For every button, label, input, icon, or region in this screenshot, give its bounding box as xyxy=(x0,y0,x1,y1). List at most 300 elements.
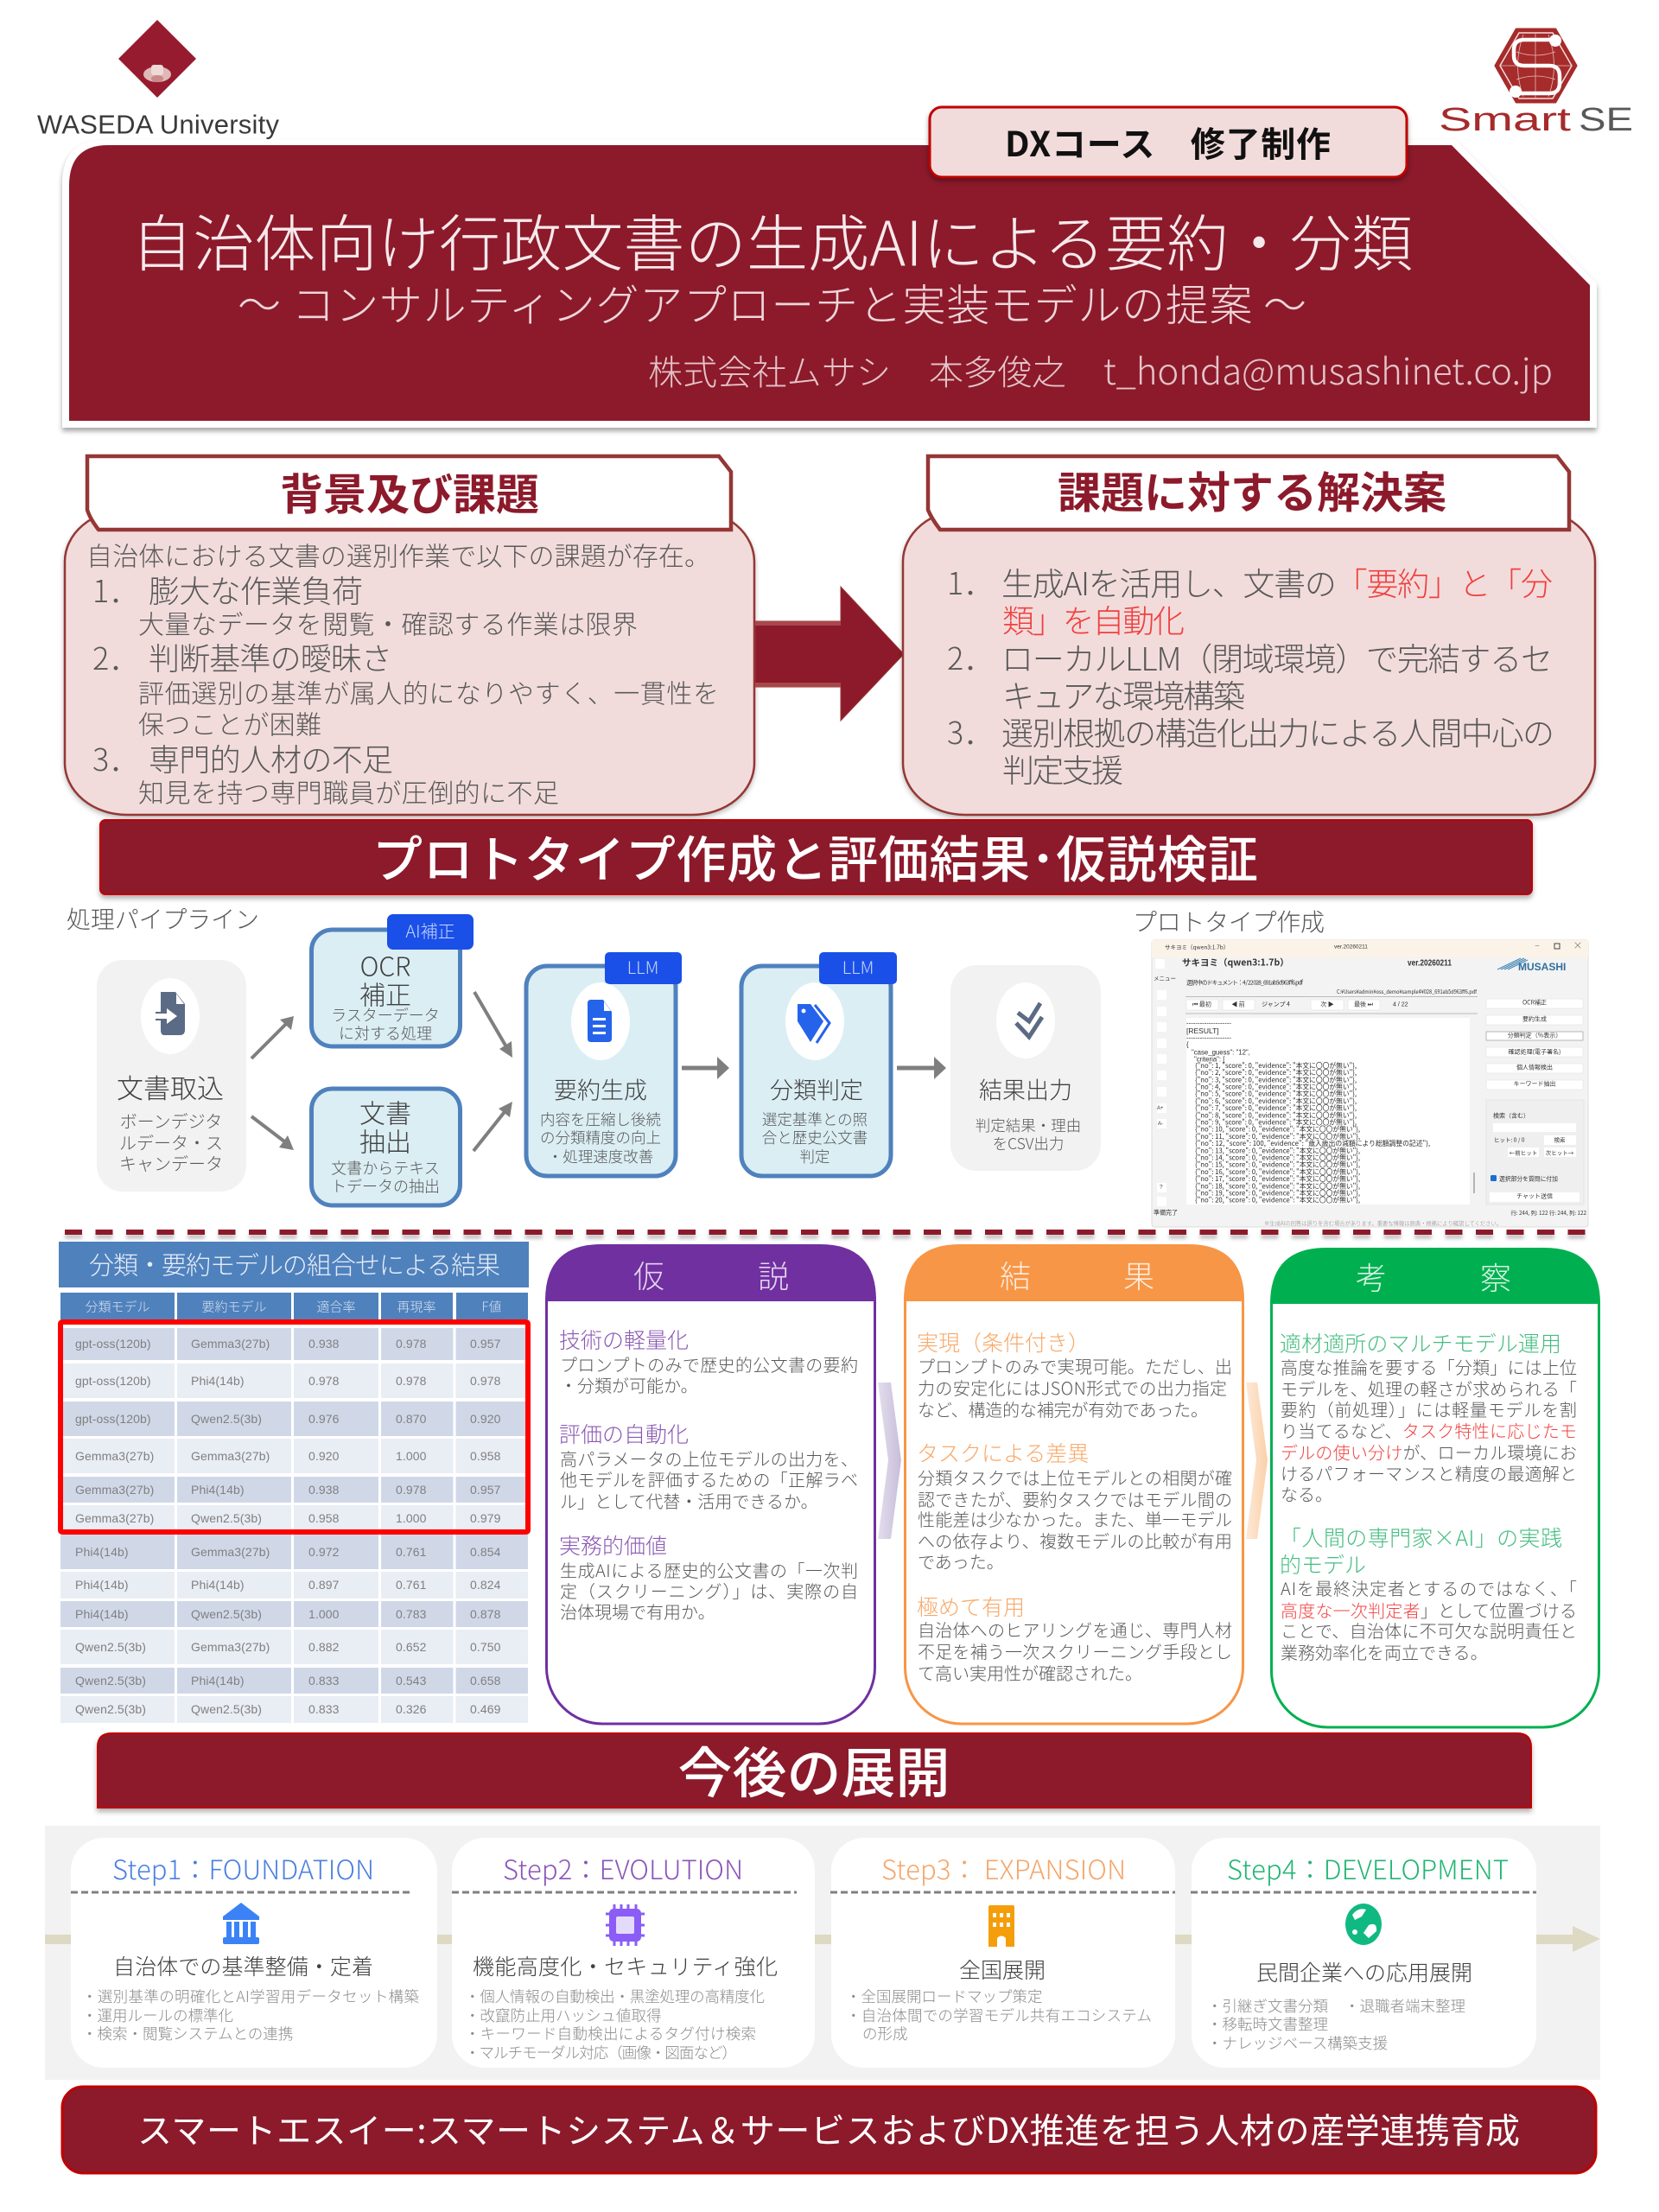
result text area: {"no": 12, "score": 100, "evidence": "歳入歳出の減額により総額調整の記述"}, xyxy=(1195,1139,1430,1148)
panel heading tab: 課題に対する解決案 xyxy=(1058,459,1446,521)
table header row: 再現率 xyxy=(397,1297,436,1315)
card: step 1: ・検索・閲覧システムとの連携 xyxy=(82,2023,293,2044)
table rows: 0.897 xyxy=(308,1578,340,1592)
card: step 2: 機能高度化・セキュリティ強化 xyxy=(473,1950,778,1981)
text: automated evaluation: 高パラメータの上位モデルの出力を、 xyxy=(560,1446,858,1471)
table rows: 0.978 xyxy=(396,1374,427,1388)
footer banner xyxy=(62,2087,1596,2173)
text: automated evaluation xyxy=(559,1418,858,1513)
result text area: {"no": 20, "score": 0, "evidence": "本文に〇〇が無い"}, xyxy=(1195,1196,1360,1205)
table title: 分類・要約モデルの組合せによる結果 xyxy=(89,1246,500,1282)
table rows: 0.958 xyxy=(470,1449,501,1463)
card: step 4 xyxy=(1191,1838,1536,2068)
subtitle: 〜 コンサルティングアプローチと実装モデルの提案 〜 xyxy=(238,271,1306,334)
solution list: キュアな環境構築 xyxy=(1002,671,1245,717)
timeline arrow xyxy=(45,1926,1600,1952)
step: OCR correction xyxy=(311,914,474,1046)
logo: Smart SE xyxy=(1439,29,1633,138)
logo: WASEDA University xyxy=(37,20,280,140)
text: practical value: 実務的価値 xyxy=(559,1529,667,1560)
text: multi-model use: 高度な推論を要する「分類」には上位 xyxy=(1281,1354,1577,1379)
left toolbar: A- xyxy=(1158,1122,1163,1127)
left toolbar xyxy=(1154,959,1176,1206)
text: lightweight technology: 技術の軽量化 xyxy=(559,1324,689,1355)
issue list: 専門的人材の不足 xyxy=(149,735,393,780)
result text area: {"no": 7, "score": 0, "evidence": "本文に〇〇が無い"}, xyxy=(1195,1103,1357,1113)
step: summary generation: 内容を圧縮し後続 xyxy=(540,1109,661,1130)
section banner: future development: 今後の展開 xyxy=(677,1730,950,1808)
panel heading tab xyxy=(87,456,731,530)
search and chat group: 検索（含む） xyxy=(1493,1111,1529,1120)
step: OCR correction: に対する処理 xyxy=(339,1022,432,1045)
table rows: Qwen2.5(3b) xyxy=(75,1640,146,1654)
card: step 4: ・ナレッジベース構築支援 xyxy=(1207,2032,1388,2054)
text: multi-model use: り当てるなど、タスク特性に応じたモ xyxy=(1281,1417,1577,1442)
step: classification: 選定基準との照 xyxy=(762,1109,868,1130)
side buttons xyxy=(1486,998,1583,1090)
solution list: 3． xyxy=(947,709,995,753)
left toolbar: A+ xyxy=(1157,1106,1164,1111)
table rows: Phi4(14b) xyxy=(191,1374,245,1388)
text: lightweight technology: ・分類が可能か。 xyxy=(560,1372,698,1397)
result text area: {"no": 10, "score": 0, "evidence": "本文に〇〇が無い"}, xyxy=(1195,1125,1360,1135)
card: step 4: Step4：DEVELOPMENT xyxy=(1227,1848,1509,1887)
solution list: ローカルLLM（閉域環境）で完結するセ xyxy=(1001,633,1553,680)
panel header xyxy=(904,1244,1244,1301)
table rows: Qwen2.5(3b) xyxy=(75,1702,146,1716)
step: document intake: 文書取込 xyxy=(117,1067,224,1106)
table rows: Phi4(14b) xyxy=(191,1483,245,1497)
table rows: 0.658 xyxy=(470,1674,501,1688)
icon: globe xyxy=(1345,1904,1382,1945)
side buttons: OCR補正 xyxy=(1522,998,1547,1007)
card: step 1: ・選別基準の明確化とAI学習用データセット構築 xyxy=(82,1986,419,2007)
table rows: Qwen2.5(3b) xyxy=(191,1511,262,1525)
prototype screenshot: 次 ▶ xyxy=(1320,1000,1334,1008)
issue list: 3． xyxy=(92,735,140,780)
text: task differences: タスクによる差異 xyxy=(917,1437,1089,1468)
table rows: 0.750 xyxy=(470,1640,501,1654)
badge: DX course xyxy=(930,107,1407,177)
prototype screenshot: 準備完了 xyxy=(1154,1208,1178,1217)
table rows: Gemma3(27b) xyxy=(191,1640,270,1654)
card: step 3: 全国展開 xyxy=(959,1954,1046,1985)
prototype screenshot: 4 / 22 xyxy=(1393,1002,1408,1007)
card: step 4: 民間企業への応用展開 xyxy=(1256,1956,1472,1987)
text: human expert and AI model: AIを最終決定者とするのではなく、「 xyxy=(1281,1575,1577,1600)
prototype screenshot: ◀ 前 xyxy=(1231,1000,1245,1008)
solution list xyxy=(947,558,1554,791)
result text area: -------------------- xyxy=(1186,1020,1231,1027)
prototype screenshot: ⏮ 最初 xyxy=(1192,1000,1211,1008)
table rows: 0.976 xyxy=(308,1412,340,1426)
step: result output xyxy=(950,965,1101,1171)
table header row xyxy=(60,1293,528,1319)
table rows: 0.469 xyxy=(470,1702,501,1716)
text: feasible with conditions: など、構造的な補完が有効であった。 xyxy=(918,1396,1208,1421)
panel header: 考 xyxy=(1356,1254,1387,1299)
table rows: 0.761 xyxy=(396,1578,427,1592)
table rows: 0.938 xyxy=(308,1337,340,1351)
panel heading tab xyxy=(928,456,1569,530)
author line: 本多俊之 xyxy=(929,345,1066,395)
dashed divider xyxy=(65,1232,1590,1236)
card: step 1: ・運用ルールの標準化 xyxy=(82,2005,233,2026)
step: classification: 分類判定 xyxy=(770,1071,863,1105)
table rows: 0.978 xyxy=(308,1374,340,1388)
table rows: 0.824 xyxy=(470,1578,501,1592)
issue list xyxy=(86,536,719,810)
result text area: {"no": 15, "score": 0, "evidence": "本文に〇〇が無い"}, xyxy=(1195,1160,1360,1170)
issue list: 評価選別の基準が属人的になりやすく、一貫性を xyxy=(138,673,719,711)
table rows: Phi4(14b) xyxy=(75,1545,129,1559)
text: feasible with conditions: 力の安定化にはJSON形式での出力指定 xyxy=(918,1375,1227,1400)
table rows: Gemma3(27b) xyxy=(191,1545,270,1559)
left toolbar: ? xyxy=(1160,1184,1163,1191)
prototype screenshot: – xyxy=(1535,938,1540,952)
text: human expert and AI model: 「人間の専門家×AI」の実践 xyxy=(1280,1522,1562,1553)
table rows: 0.972 xyxy=(308,1545,340,1559)
roadmap background xyxy=(45,1826,1600,2080)
panel: background and issues xyxy=(65,456,754,815)
text: multi-model use: 要約（前処理）」には軽量モデルを割 xyxy=(1281,1396,1577,1421)
table rows: Gemma3(27b) xyxy=(191,1449,270,1463)
solution list: 選別根拠の構造化出力による人間中心の xyxy=(1001,708,1554,754)
icon: office building xyxy=(988,1905,1014,1947)
author line: 株式会社ムサシ xyxy=(648,345,891,395)
prototype screenshot: ジャンプ 4 xyxy=(1262,1000,1290,1008)
side buttons: 要約生成 xyxy=(1522,1014,1547,1023)
table rows: 0.854 xyxy=(470,1545,501,1559)
step: text extraction xyxy=(311,1089,460,1205)
text: task differences: であった。 xyxy=(918,1548,1004,1573)
highlight: red frame xyxy=(60,1322,528,1532)
step: summary generation: LLM xyxy=(627,954,658,979)
table rows: 0.957 xyxy=(470,1483,501,1497)
prototype screenshot: ver.20260211 xyxy=(1408,959,1452,968)
step: OCR correction: OCR xyxy=(360,946,410,984)
card: step 3: の形成 xyxy=(862,2023,907,2044)
table rows: 0.761 xyxy=(396,1545,427,1559)
text: automated evaluation: 他モデルを評価するための「正解ラベ xyxy=(560,1466,858,1491)
table rows: 1.000 xyxy=(308,1607,340,1621)
icon: institution xyxy=(223,1903,259,1944)
text: feasible with conditions: プロンプトのみで実現可能。ただし、出 xyxy=(918,1353,1232,1378)
table rows: 0.783 xyxy=(396,1607,427,1621)
result text area: {"no": 16, "score": 0, "evidence": "本文に〇〇が無い"}, xyxy=(1195,1167,1360,1177)
result text area: {"no": 13, "score": 0, "evidence": "本文に〇〇が無い"}, xyxy=(1195,1146,1360,1155)
text: practical value: 治体現場で有用か。 xyxy=(560,1599,715,1624)
table rows: gpt-oss(120b) xyxy=(75,1337,151,1351)
card: step 1: Step1：FOUNDATION xyxy=(112,1848,374,1887)
step: classification: 判定 xyxy=(800,1146,830,1167)
prototype screenshot: C:¥Users¥admin¥oss_demo¥sample4¥028_691ab5d963ff6.pdf xyxy=(1337,988,1478,995)
result text area: "criteria": [ xyxy=(1194,1056,1225,1063)
search and chat group: ヒット: 0 / 0 xyxy=(1494,1135,1525,1143)
text: automated evaluation: 評価の自動化 xyxy=(559,1418,689,1449)
step: document intake xyxy=(97,960,246,1192)
result text area: {"no": 18, "score": 0, "evidence": "本文に〇〇が無い"}, xyxy=(1195,1181,1360,1191)
text: highly useful: 不足を補う一次スクリーニング手段とし xyxy=(918,1638,1232,1663)
table rows: Phi4(14b) xyxy=(75,1607,129,1621)
prototype screenshot: ※生成AIの回答は誤りを含む場合があります。重要な情報は原典・根拠により確認してください。 xyxy=(1264,1219,1502,1227)
text: human expert and AI model: 高度な一次判定者」として位置づける xyxy=(1281,1597,1577,1622)
table rows xyxy=(60,1322,528,1725)
results table xyxy=(59,1242,529,1725)
step: summary generation: 要約生成 xyxy=(554,1071,647,1105)
text: multi-model use: モデルを、処理の軽さが求められる「 xyxy=(1281,1376,1577,1401)
panel heading tab: 背景及び課題 xyxy=(280,461,539,523)
table rows: gpt-oss(120b) xyxy=(75,1412,151,1426)
text: feasible with conditions xyxy=(917,1326,1232,1421)
result text area: -------------------- xyxy=(1186,1033,1231,1042)
step: text extraction: 文書 xyxy=(359,1093,411,1131)
table rows: 0.920 xyxy=(470,1412,501,1426)
step: text extraction: 文書からテキス xyxy=(331,1157,440,1179)
result text area: {"no": 3, "score": 0, "evidence": "本文に〇〇が無い"}, xyxy=(1195,1075,1357,1084)
pipeline label: 処理パイプライン xyxy=(67,901,259,936)
prototype screenshot: サキヨミ（qwen3:1.7b） xyxy=(1182,957,1289,969)
section banner: future development xyxy=(98,1730,1531,1808)
search and chat group: ←前ヒット xyxy=(1510,1147,1537,1156)
issue list: 2． xyxy=(92,634,140,679)
table rows: 1.000 xyxy=(396,1511,427,1525)
prototype label: プロトタイプ作成 xyxy=(1133,904,1325,938)
prototype screenshot xyxy=(1152,938,1588,1227)
author line: t_honda@musashinet.co.jp xyxy=(1103,343,1553,396)
panel header: 説 xyxy=(758,1252,789,1297)
solution list: 類」を自動化 xyxy=(1002,595,1185,642)
table header row: F値 xyxy=(482,1297,501,1315)
result text area: "case_guess": "12", xyxy=(1192,1049,1250,1056)
issue list: 大量なデータを閲覧・確認する作業は限界 xyxy=(138,604,638,642)
text: lightweight technology xyxy=(559,1324,858,1397)
text: human expert and AI model: 的モデル xyxy=(1280,1548,1366,1580)
solution list: 生成AIを活用し、文書の「要約」と「分 xyxy=(1001,558,1553,605)
result text area: [RESULT] xyxy=(1186,1027,1219,1035)
prototype screenshot: ver.20260211 xyxy=(1334,944,1368,950)
title: 自治体向け行政文書の生成AIによる要約・分類 xyxy=(131,195,1413,283)
panel header: 果 xyxy=(1123,1252,1154,1297)
result text area: {"no": 11, "score": 0, "evidence": "本文に〇〇が無い"}, xyxy=(1195,1132,1360,1141)
text: practical value: 生成AIによる歴史的公文書の「一次判 xyxy=(560,1557,858,1582)
text: task differences: 性能差は少なかった。また、単一モデル xyxy=(918,1506,1232,1531)
text: lightweight technology: プロンプトのみで歴史的公文書の要約 xyxy=(560,1351,858,1376)
step: document intake: キャンデータ xyxy=(119,1150,223,1175)
result text area: {"no": 19, "score": 0, "evidence": "本文に〇〇が無い"}, xyxy=(1195,1188,1360,1198)
icon: tags xyxy=(798,1004,830,1043)
table header row: 分類モデル xyxy=(85,1297,150,1315)
side buttons: キーワード抽出 xyxy=(1514,1079,1555,1088)
table rows: 0.978 xyxy=(396,1337,427,1351)
search and chat group: 次ヒット→ xyxy=(1546,1147,1574,1156)
table rows: Qwen2.5(3b) xyxy=(191,1607,262,1621)
card: step 2: ・改竄防止用ハッシュ値取得 xyxy=(465,2005,662,2026)
prototype screenshot: × xyxy=(1573,938,1583,952)
step: result output: 判定結果・理由 xyxy=(976,1115,1081,1136)
table rows: 0.543 xyxy=(396,1674,427,1688)
text: highly useful: 自治体へのヒアリングを通じ、専門人材 xyxy=(918,1617,1232,1642)
card: step 4: ・移転時文書整理 xyxy=(1207,2013,1328,2035)
icon: file import xyxy=(154,992,185,1035)
text: automated evaluation: ル」として代替・活用できるか。 xyxy=(560,1488,818,1513)
table rows: Gemma3(27b) xyxy=(75,1483,154,1497)
text: multi-model use: なる。 xyxy=(1281,1481,1332,1506)
section banner: prototype and evaluation xyxy=(100,819,1532,894)
step: summary generation xyxy=(526,952,682,1176)
step: summary generation: ・処理速度改善 xyxy=(548,1146,653,1167)
footer banner: スマートエスイー:スマートシステム＆サービスおよびDX推進を担う人材の産学連携育成 xyxy=(137,2103,1520,2153)
icon: chip xyxy=(606,1904,645,1946)
side buttons: 確認処理(電子署名) xyxy=(1509,1047,1560,1056)
table rows: Gemma3(27b) xyxy=(75,1449,154,1463)
issue list: 知見を持つ専門職員が圧倒的に不足 xyxy=(138,772,559,810)
card: step 3 xyxy=(830,1838,1175,2068)
logo: WASEDA University: WASEDA University xyxy=(37,109,280,140)
panel header: 結 xyxy=(1000,1252,1031,1297)
search and chat group xyxy=(1486,1100,1584,1205)
search and chat group: 検索 xyxy=(1554,1135,1566,1143)
pipeline diagram xyxy=(97,914,1101,1205)
table rows: 0.882 xyxy=(308,1640,340,1654)
result text area: {"no": 1, "score": 0, "evidence": "本文に〇〇が無い"}, xyxy=(1195,1061,1357,1071)
MUSASHI mark xyxy=(1497,958,1566,973)
card: step 1: 自治体での基準整備・定着 xyxy=(113,1950,373,1981)
text: multi-model use xyxy=(1280,1327,1577,1506)
text: feasible with conditions: 実現（条件付き） xyxy=(917,1326,1090,1357)
table rows: Phi4(14b) xyxy=(191,1674,245,1688)
table rows: 0.833 xyxy=(308,1702,340,1716)
text: multi-model use: けるパフォーマンスと精度の最適解と xyxy=(1281,1460,1577,1485)
section banner: prototype and evaluation: プロトタイプ作成と評価結果･仮説検証 xyxy=(372,819,1258,892)
text: human expert and AI model: 業務効率化を両立できる。 xyxy=(1281,1639,1488,1664)
text: practical value: 定（スクリーニング）」は、実際の自 xyxy=(560,1578,858,1603)
text: multi-model use: デルの使い分けが、ローカル環境にお xyxy=(1281,1439,1577,1464)
table rows: Phi4(14b) xyxy=(191,1578,245,1592)
text: task differences: 分類タスクでは上位モデルとの相関が確 xyxy=(918,1465,1232,1490)
side buttons: 分類判定（%表示） xyxy=(1508,1031,1561,1039)
table rows: Qwen2.5(3b) xyxy=(191,1412,262,1426)
step: result output: をCSV出力 xyxy=(993,1133,1064,1154)
logo: Smart SE: SE xyxy=(1579,102,1633,138)
step: classification: LLM xyxy=(842,954,874,979)
table rows: 0.870 xyxy=(396,1412,427,1426)
author line xyxy=(648,343,1553,396)
chevron: hypothesis to results xyxy=(878,1382,901,1539)
table rows: 0.326 xyxy=(396,1702,427,1716)
step: OCR correction: 補正 xyxy=(359,975,411,1013)
left toolbar: メニュー xyxy=(1154,973,1176,982)
panel: proposed solutions xyxy=(903,456,1595,815)
table rows: Gemma3(27b) xyxy=(191,1337,270,1351)
search and chat group: チャット送信 xyxy=(1516,1192,1553,1200)
card: step 2: ・個人情報の自動検出・黒塗処理の高精度化 xyxy=(465,1986,765,2007)
result text area: {"no": 9, "score": 0, "evidence": "本文に〇〇が無い"}, xyxy=(1195,1117,1357,1127)
prototype screenshot: 選択中のドキュメント：4 / 22 028_691ab5d963ff6.pdf xyxy=(1186,977,1304,986)
icon: document xyxy=(588,1000,612,1042)
panel header: 仮 xyxy=(633,1252,664,1297)
result text area: { xyxy=(1186,1040,1189,1049)
chevron: results to discussion xyxy=(1246,1382,1268,1539)
panel header xyxy=(1270,1248,1600,1304)
issue list: 保つことが困難 xyxy=(138,704,321,742)
card: step 3: Step3： EXPANSION xyxy=(881,1848,1126,1887)
step: classification xyxy=(741,952,897,1176)
solution list: 判定支援 xyxy=(1002,745,1123,791)
table rows: 0.958 xyxy=(308,1511,340,1525)
card: step 1 xyxy=(71,1838,437,2068)
card: step 3: ・自治体間での学習モデル共有エコシステム xyxy=(846,2005,1152,2026)
result text area: {"no": 8, "score": 0, "evidence": "本文に〇〇が無い"}, xyxy=(1195,1110,1357,1120)
arrows between steps xyxy=(251,992,946,1151)
table title xyxy=(59,1242,529,1287)
step: document intake: ルデータ・ス xyxy=(119,1129,223,1154)
step: OCR correction: AI補正 xyxy=(405,918,455,943)
text: human expert and AI model: ことで、自治体に不可欠な説明責任と xyxy=(1281,1618,1577,1643)
result text area: {"no": 4, "score": 0, "evidence": "本文に〇〇が無い"}, xyxy=(1195,1082,1357,1091)
text: highly useful: て高い実用性が確認された。 xyxy=(918,1660,1142,1685)
prototype screenshot: 最後 ⏭ xyxy=(1354,1000,1374,1008)
card: step 4: ・退職者端末整理 xyxy=(1344,1995,1465,2017)
side buttons: 個人情報検出 xyxy=(1516,1063,1553,1071)
card: step 4: ・引継ぎ文書分類 xyxy=(1207,1995,1328,2017)
panel header: 察 xyxy=(1480,1254,1511,1299)
issue list: 自治体における文書の選別作業で以下の課題が存在。 xyxy=(86,536,710,574)
table rows: 1.000 xyxy=(396,1449,427,1463)
table rows: 0.978 xyxy=(396,1483,427,1497)
text: task differences xyxy=(917,1437,1232,1573)
text: highly useful xyxy=(917,1591,1232,1685)
prototype screenshot: 行: 244, 列: 122 行: 244, 列: 122 xyxy=(1510,1209,1586,1217)
table rows: 0.938 xyxy=(308,1483,340,1497)
prototype screenshot: サキヨミ（qwen3:1.7b） xyxy=(1165,942,1229,950)
table rows: gpt-oss(120b) xyxy=(75,1374,151,1388)
logo: Smart SE: Smart xyxy=(1439,102,1572,138)
result text area: {"no": 17, "score": 0, "evidence": "本文に〇〇が無い"}, xyxy=(1195,1174,1360,1184)
panel: hypothesis xyxy=(545,1244,876,1724)
text: multi-model use: 適材適所のマルチモデル運用 xyxy=(1280,1327,1561,1358)
table header row: 要約モデル xyxy=(201,1297,267,1315)
solution list: 2． xyxy=(947,634,995,679)
icon: double check xyxy=(1016,1003,1042,1037)
MUSASHI mark: MUSASHI xyxy=(1518,961,1566,973)
step: OCR correction: ラスターデータ xyxy=(331,1004,440,1027)
result text area xyxy=(1186,1018,1474,1205)
text: highly useful: 極めて有用 xyxy=(917,1591,1025,1622)
table rows: Qwen2.5(3b) xyxy=(75,1674,146,1688)
table rows: 0.878 xyxy=(470,1607,501,1621)
panel header xyxy=(545,1244,876,1301)
text: task differences: 認できたが、要約タスクではモデル間の xyxy=(918,1486,1232,1511)
card: step 2: ・キーワード自動検出によるタグ付け検索 xyxy=(465,2023,756,2044)
step: text extraction: 抽出 xyxy=(359,1122,411,1160)
table header row: 適合率 xyxy=(316,1297,356,1315)
header panel xyxy=(62,140,1597,428)
issue list: 判断基準の曖昧さ xyxy=(149,634,392,679)
panel: results xyxy=(904,1244,1244,1724)
table rows: Phi4(14b) xyxy=(75,1578,129,1592)
text: practical value xyxy=(559,1529,858,1624)
table rows: Qwen2.5(3b) xyxy=(191,1702,262,1716)
card: step 2: Step2：EVOLUTION xyxy=(503,1848,743,1887)
badge: DX course: DXコース 修了制作 xyxy=(1005,117,1331,167)
result text area: {"no": 6, "score": 0, "evidence": "本文に〇〇が無い"}, xyxy=(1195,1096,1357,1106)
panel: discussion xyxy=(1270,1248,1600,1727)
solution list: 1． xyxy=(947,559,995,604)
card: step 3: ・全国展開ロードマップ策定 xyxy=(846,1986,1042,2007)
step: document intake: ボーンデジタ xyxy=(120,1108,222,1133)
card: step 2: ・マルチモーダル対応（画像・図面など） xyxy=(465,2042,737,2063)
